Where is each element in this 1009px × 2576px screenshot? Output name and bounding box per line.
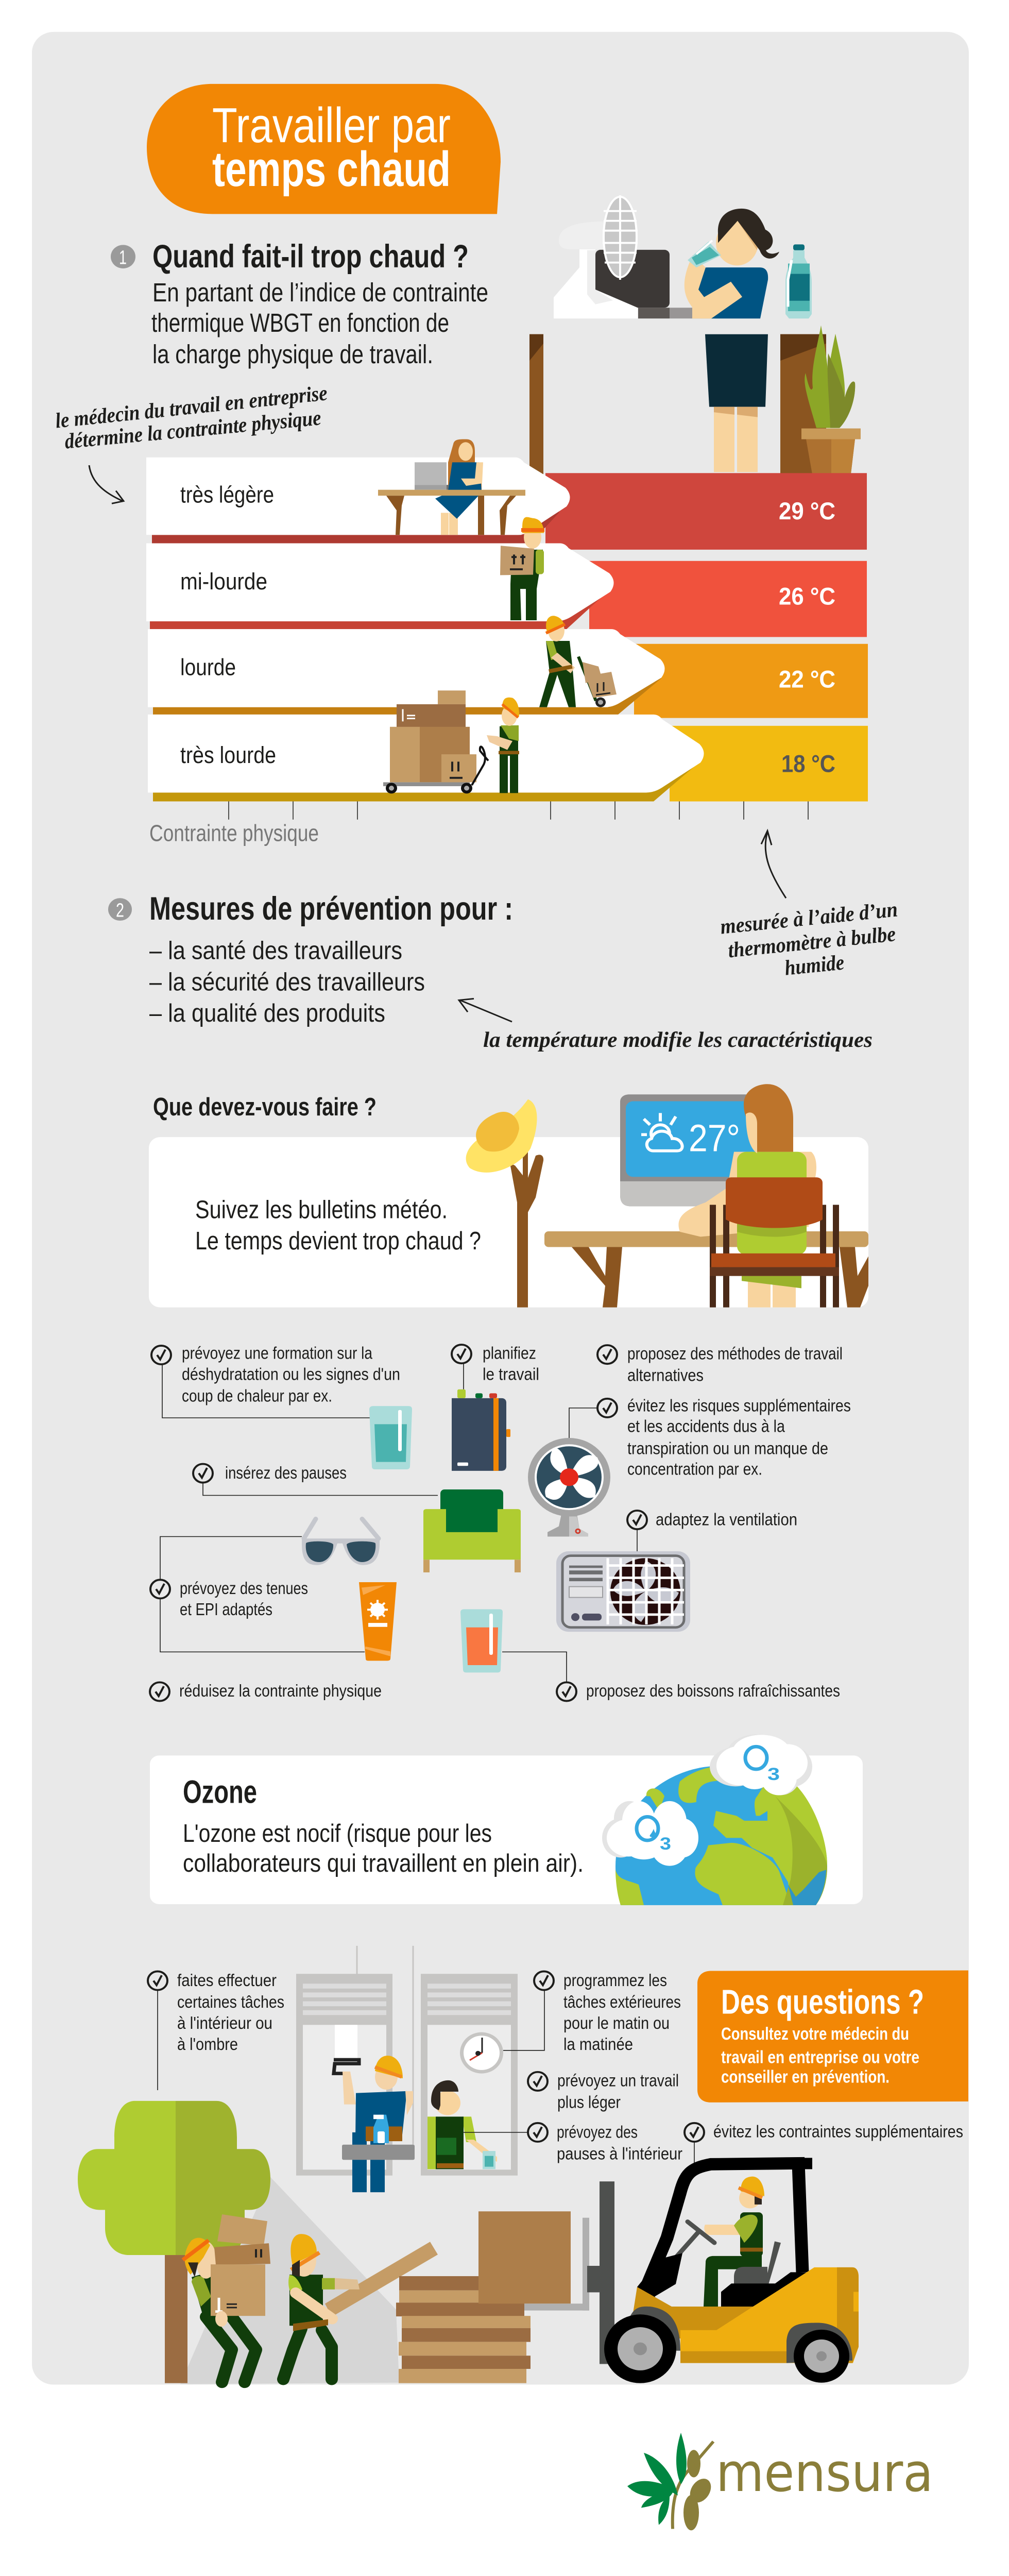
action: work indoors or in shade: à l'intérieur ou [177, 2014, 272, 2033]
bar 2: medium heavy 26 C [146, 543, 867, 637]
icon: desk fan [554, 195, 638, 318]
bar 1: very light 29 C: 29 °C [779, 498, 835, 525]
chart: temperature bars by physical strain [146, 457, 868, 802]
list: prevention measures: – la santé des travailleurs [149, 936, 402, 964]
arrow: temperature note to list [459, 998, 512, 1022]
icon: wheels [604, 2307, 852, 2383]
illustration: woman at computer with weather on screen [544, 1084, 868, 1308]
icon: standing woman drinking [685, 209, 779, 472]
action: insert breaks with armchair: insérez des pauses [225, 1464, 347, 1483]
icon: monitor [595, 250, 711, 318]
panel: ozone [150, 1755, 863, 1904]
callout: occupational physician [54, 381, 329, 453]
action: alternative working methods [597, 1344, 843, 1385]
action: avoid extra strain [685, 2122, 963, 2170]
icon: monitor with weather: 27° [689, 1117, 740, 1160]
icon: ozone cloud lower: 3 [660, 1834, 671, 1854]
action: alternative working methods: alternatives [627, 1366, 704, 1385]
icon: potted plant [801, 326, 861, 474]
arrow: to thermometer note [761, 831, 786, 898]
action: schedule outdoor tasks in the morning: tâches extérieures [563, 1993, 681, 2012]
callout: questions: Des questions ? [721, 1983, 924, 2021]
icon: armchair [423, 1489, 521, 1572]
action: insert breaks with armchair [193, 1464, 521, 1572]
panel: ozone: Ozone [183, 1774, 257, 1810]
bar 4: very heavy 18 C [148, 715, 868, 802]
action: schedule outdoor tasks in the morning: programmez les [563, 1971, 667, 1990]
action: schedule outdoor tasks in the morning: pour le matin ou [563, 2014, 670, 2033]
section 1 text block: la charge physique de travail. [152, 340, 433, 369]
icon: juice glass [460, 1609, 503, 1672]
callout: wet bulb thermometer: thermomètre à bulbe [727, 922, 897, 962]
bar 3: heavy 22 C: lourde [180, 654, 236, 680]
axis label: physical strain: Contrainte physique [149, 820, 319, 846]
action: avoid extra risks with fan [528, 1396, 851, 1536]
action: schedule outdoor tasks in the morning: la matinée [563, 2035, 633, 2054]
icon: body [629, 2267, 859, 2363]
action: plan the work with notebook: planifiez [483, 1344, 536, 1363]
illustration: coat stand with hat [466, 1099, 543, 1308]
section 1 text block [151, 278, 488, 369]
icon: sunglasses [302, 1519, 380, 1565]
icon: desk legs [529, 334, 826, 474]
action: lighter work: plus léger [557, 2093, 621, 2112]
illustration: worker carrying plank [283, 2234, 438, 2379]
panel: weather bulletins: Le temps devient trop chaud ? [195, 1226, 481, 1255]
icon: sunscreen tube [359, 1582, 397, 1660]
action: lighter work [528, 2071, 679, 2112]
desk with woman, fan and plant [529, 195, 861, 474]
action: schedule outdoor tasks in the morning [503, 1971, 681, 2054]
callout: questions: travail en entreprise ou votre [721, 2047, 919, 2067]
action: dehydration training with glass: coup de chaleur par ex. [182, 1386, 332, 1405]
action: work indoors or in shade: à l'ombre [177, 2035, 238, 2054]
action: adapted clothing and PPE with sunglasses and sunscreen: et EPI adaptés [180, 1600, 272, 1619]
icon: seat [734, 2241, 781, 2284]
action: alternative working methods: proposez des méthodes de travail [627, 1344, 843, 1363]
action: indoor breaks: pauses à l'intérieur [557, 2144, 682, 2163]
callout: temperature modifies characteristics: la température modifie les caractéristiques [483, 1028, 873, 1052]
callout: occupational physician: le médecin du travail en entreprise [54, 381, 329, 433]
bar 4: very heavy 18 C: très lourde [180, 742, 276, 768]
icon: round fan [528, 1438, 610, 1536]
title: Travailler par [212, 98, 451, 153]
bar 2: medium heavy 26 C: 26 °C [779, 583, 835, 610]
icon: water glass [369, 1406, 412, 1469]
section 1 text block: thermique WBGT en fonction de [151, 308, 449, 338]
action: avoid extra risks with fan: concentration par ex. [627, 1460, 762, 1479]
section 1 heading: 1 [119, 247, 127, 268]
action: avoid extra risks with fan: évitez les risques supplémentaires [627, 1396, 851, 1415]
icon: ozone cloud lower [602, 1801, 698, 1866]
bar 1: very light 29 C [146, 457, 867, 550]
callout: questions [697, 1971, 968, 2103]
title [147, 84, 501, 214]
action: plan the work with notebook [452, 1344, 539, 1471]
panel: ozone: L'ozone est nocif (risque pour les [183, 1819, 492, 1848]
icon: olive branch [627, 2433, 715, 2530]
icon: notebook [452, 1389, 510, 1471]
action: work indoors or in shade: certaines tâches [177, 1993, 284, 2012]
section 2 heading: Mesures de prévention pour : [149, 891, 513, 927]
illustration: worker on break with a glass [427, 2080, 497, 2169]
callout: wet bulb thermometer [719, 897, 899, 980]
panel: weather bulletins [149, 1137, 868, 1308]
action: lighter work: prévoyez un travail [557, 2071, 679, 2090]
illustration: forklift with driver [478, 2158, 859, 2383]
callout: questions: Consultez votre médecin du [721, 2024, 909, 2044]
section 2 heading: 2 [116, 900, 124, 921]
illustration: seated woman at table [378, 439, 525, 535]
illustration: worker with hand truck [539, 616, 617, 707]
list: prevention measures: – la sécurité des travailleurs [149, 967, 425, 996]
action: plan the work with notebook: le travail [483, 1365, 539, 1384]
action: adapted clothing and PPE with sunglasses and sunscreen: prévoyez des tenues [180, 1579, 308, 1598]
logo: mensura: mensura [716, 2442, 933, 2504]
scale ticks [229, 802, 808, 820]
heading: what to do: Que devez-vous faire ? [153, 1092, 377, 1121]
action: indoor breaks: prévoyez des [557, 2123, 638, 2142]
illustration: worker carrying box [500, 517, 544, 620]
action: avoid extra risks with fan: et les accidents dus à la [627, 1417, 785, 1436]
illustration: wall clock [460, 2032, 503, 2074]
icon: chair [710, 1177, 839, 1308]
bar 3: heavy 22 C: 22 °C [779, 666, 835, 693]
section 1 text block: En partant de l’indice de contrainte [152, 278, 488, 308]
illustration: stacked boards [396, 2276, 531, 2383]
action: work indoors or in shade [148, 1971, 284, 2090]
illustration: building windows [296, 1946, 518, 2176]
action: adapted clothing and PPE with sunglasses and sunscreen [150, 1519, 397, 1660]
callout: questions: conseiller en prévention. [721, 2067, 890, 2087]
action: dehydration training with glass: prévoyez une formation sur la [182, 1344, 372, 1363]
icon: ozone cloud upper [710, 1734, 812, 1795]
bar 2: medium heavy 26 C: mi-lourde [180, 568, 267, 595]
section 1 heading [111, 239, 469, 275]
callout: wet bulb thermometer: humide [783, 951, 845, 980]
icon: ventilation unit [556, 1551, 690, 1632]
bar 1: very light 29 C: très légère [180, 481, 274, 507]
action: cold drinks with juice glass: proposez des boissons rafraîchissantes [586, 1682, 840, 1701]
logo: mensura [627, 2433, 933, 2530]
illustration: globe with ozone clouds [602, 1734, 827, 1905]
icon: table [544, 1231, 868, 1308]
icon: cab frame [637, 2158, 813, 2307]
icon: forks and load [478, 2181, 614, 2364]
list: prevention measures [149, 936, 425, 1027]
icon: water bottle [785, 244, 812, 318]
action: dehydration training with glass [151, 1344, 412, 1469]
action: cold drinks with juice glass [460, 1609, 840, 1701]
icon: driver [676, 2177, 764, 2307]
action: avoid extra risks with fan: transpiration ou un manque de [627, 1439, 828, 1458]
icon: ozone cloud upper: 3 [767, 1765, 780, 1784]
icon: globe [615, 1766, 827, 1905]
callout: wet bulb thermometer: mesurée à l’aide d’un [719, 897, 899, 939]
callout: occupational physician: détermine la contrainte physique [63, 406, 322, 453]
action: work indoors or in shade: faites effectuer [177, 1971, 277, 1990]
illustration: worker with pallet truck and boxes [383, 690, 519, 793]
illustration: worker carrying boxes [183, 2214, 270, 2382]
action: indoor breaks [464, 2123, 682, 2163]
title: temps chaud [212, 142, 451, 197]
icon: monitor with weather [620, 1094, 765, 1206]
bar 3: heavy 22 C [148, 629, 868, 718]
illustration: window cleaner on platform [334, 2025, 415, 2192]
list: prevention measures: – la qualité des produits [149, 998, 385, 1027]
section 1 heading: Quand fait-il trop chaud ? [152, 239, 469, 275]
action: reduce physical strain: réduisez la contrainte physique [179, 1682, 382, 1701]
action: adapt ventilation with air unit: adaptez la ventilation [656, 1510, 797, 1529]
arrow: to physical strain scale [89, 465, 124, 503]
icon: seated woman from behind [678, 1084, 816, 1308]
action: dehydration training with glass: déshydratation ou les signes d'un [182, 1365, 400, 1384]
illustration: tree with shade [78, 2101, 399, 2384]
panel: weather bulletins: Suivez les bulletins météo. [195, 1195, 448, 1224]
bar 4: very heavy 18 C: 18 °C [781, 750, 835, 777]
panel: ozone: collaborateurs qui travaillent en plein air). [183, 1849, 584, 1877]
action: adapt ventilation with air unit [556, 1510, 797, 1632]
